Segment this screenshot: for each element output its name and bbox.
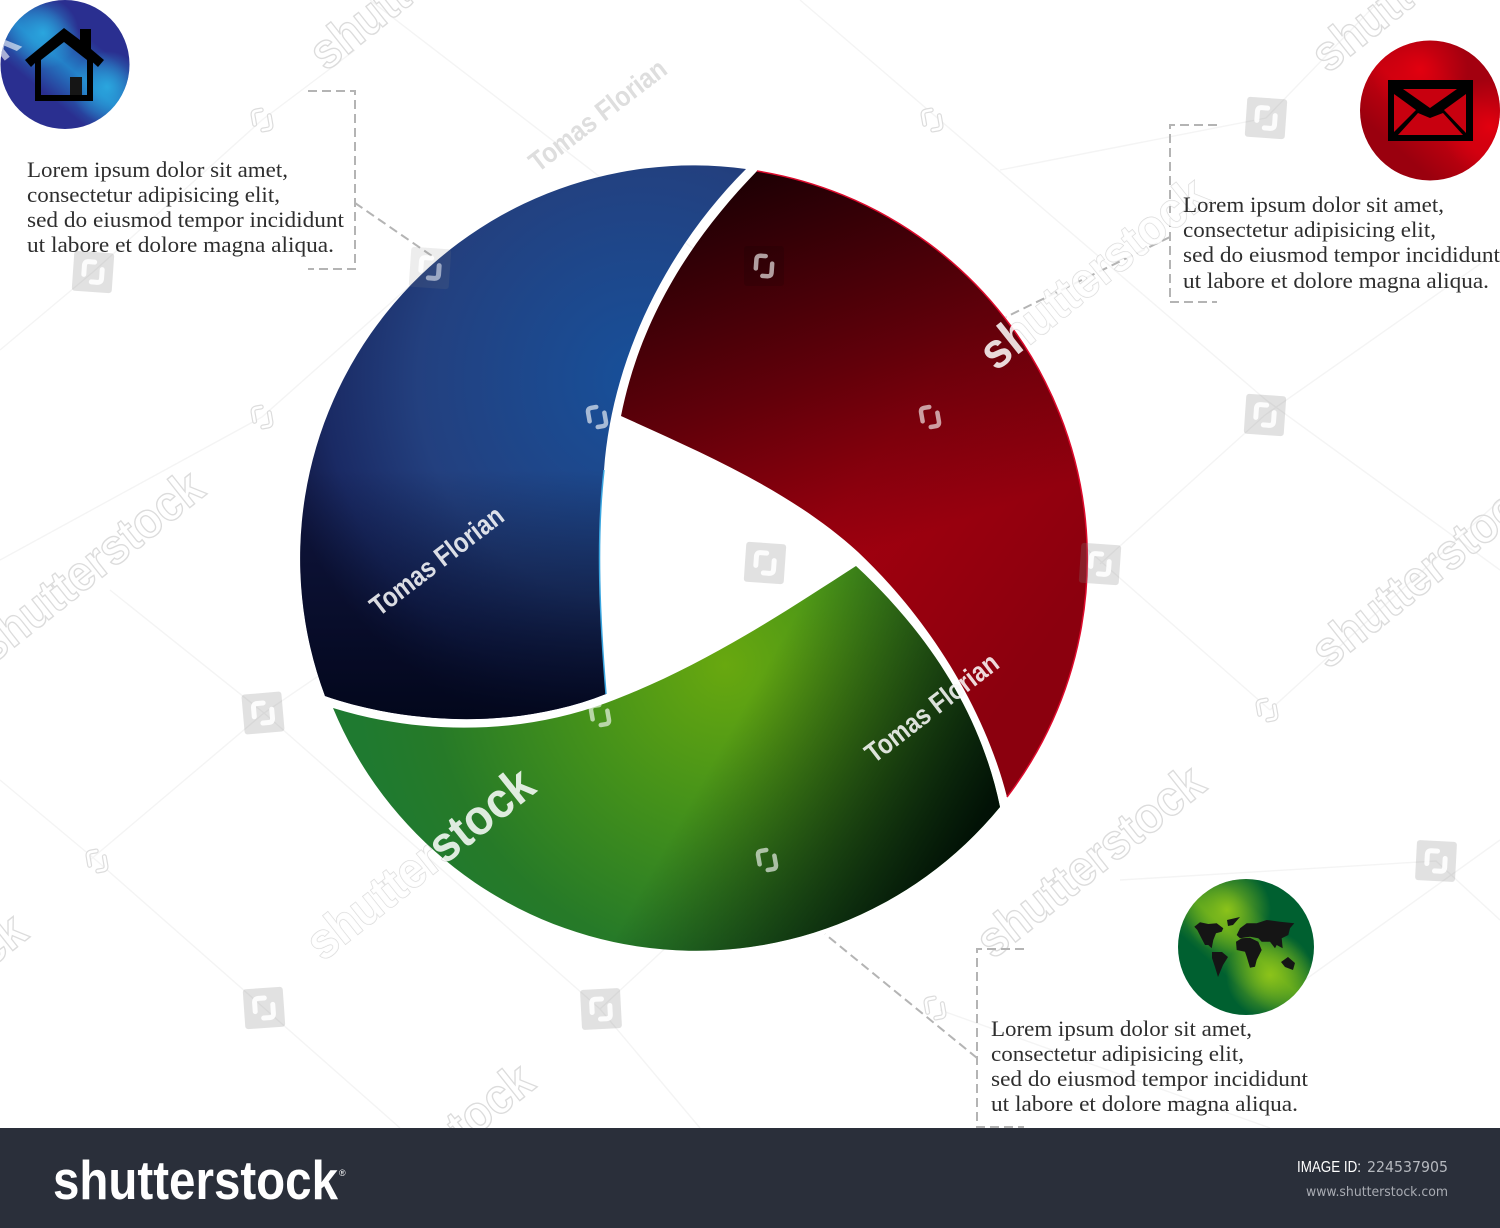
image id: IMAGE ID: (1297, 1159, 1361, 1176)
segment: blue (300, 165, 746, 719)
grey watermark layer: shutterstock (965, 753, 1215, 969)
white watermark layer: Tomas Florian (859, 647, 1005, 769)
text block: top left (27, 157, 344, 257)
white watermark layer: Tomas Florian (364, 500, 510, 622)
text block: top right: Lorem ipsum dolor sit amet, (1183, 192, 1444, 217)
text block: bottom right: consectetur adipisicing elit, (991, 1041, 1244, 1066)
text block: top left: consectetur adipisicing elit, (27, 182, 280, 207)
segment: green (333, 566, 1000, 951)
text block: top left: ut labore et dolore magna aliqua. (27, 232, 334, 257)
footer bar (0, 1128, 1500, 1228)
dashed callout: top left (308, 91, 432, 269)
white watermark layer: shutterstock (968, 165, 1218, 381)
white watermark layer: shutterstock (295, 755, 545, 971)
segment: red (621, 171, 1087, 797)
icon: globe (1178, 879, 1314, 1015)
white watermark layer (295, 165, 1218, 971)
circular diagram (300, 165, 1087, 951)
text block: top right: ut labore et dolore magna aliqua. (1183, 268, 1489, 293)
watermark stamps (72, 97, 1457, 1030)
text block: bottom right (991, 1016, 1308, 1116)
text block: top right (1183, 192, 1500, 293)
icon: envelope (1360, 40, 1500, 181)
grey watermark layer: shutterstock (968, 165, 1218, 381)
website: www.shutterstock.com (1306, 1184, 1448, 1200)
text block: top right: consectetur adipisicing elit, (1183, 217, 1436, 242)
grey watermark layer: Tomas Florian (859, 647, 1005, 769)
dashed callout: top right (1006, 125, 1217, 317)
text block: bottom right: ut labore et dolore magna aliqua. (991, 1091, 1298, 1116)
footer logo: ® (339, 1168, 346, 1178)
text block: bottom right: Lorem ipsum dolor sit amet, (991, 1016, 1252, 1041)
dashed callout: bottom right (825, 934, 1024, 1127)
icon: home (0, 0, 130, 129)
footer logo: shutterstock (53, 1149, 338, 1211)
text block: top left: Lorem ipsum dolor sit amet, (27, 157, 288, 182)
image number: 224537905 (1367, 1158, 1448, 1176)
text block: top left: sed do eiusmod tempor incididunt (27, 207, 344, 232)
text block: bottom right: sed do eiusmod tempor incididunt (991, 1066, 1308, 1091)
grey watermark layer: Tomas Florian (523, 53, 673, 178)
grey watermark layer: shutterstock (295, 755, 545, 971)
text block: top right: sed do eiusmod tempor incididunt (1183, 242, 1500, 267)
